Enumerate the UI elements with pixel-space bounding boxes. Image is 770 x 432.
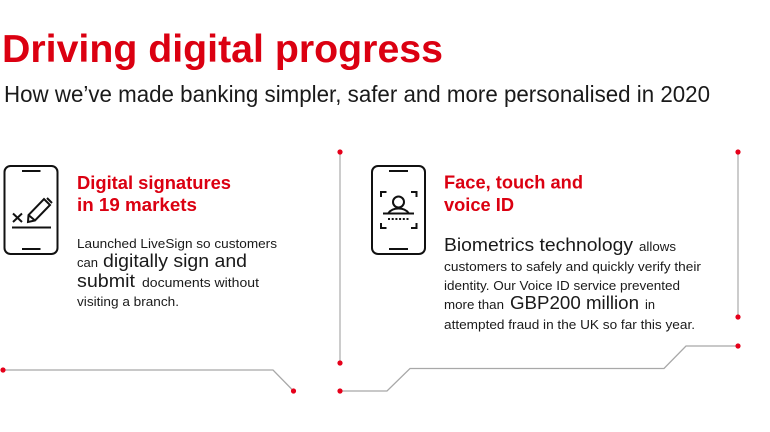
panel: face, touch and voice ID: [372, 166, 702, 332]
text block: biometrics description: identity. Our Voice ID service prevented: [444, 278, 680, 293]
connector: right vertical line: [735, 149, 741, 320]
heading: digital signatures: in 19 markets: [77, 195, 197, 215]
heading: face, touch and voice ID: voice ID: [444, 195, 514, 215]
text block: biometrics description: in: [645, 297, 655, 312]
icon: phone with signature: [4, 166, 58, 254]
text block: digital signatures description: visiting a branch.: [77, 294, 179, 309]
text block: digital signatures description: can: [77, 255, 98, 270]
text block: digital signatures description: submit: [77, 271, 135, 291]
text block: biometrics description: more than: [444, 297, 504, 312]
text block: biometrics description: allows: [639, 239, 677, 254]
panel: digital signatures: [4, 166, 278, 309]
connector: left circuit line: [0, 367, 296, 394]
connector: middle vertical line: [337, 149, 343, 366]
text block: biometrics description: [444, 235, 702, 332]
text block: digital signatures description: Launched LiveSign so customers: [77, 236, 278, 251]
heading: face, touch and voice ID: [444, 172, 583, 215]
icon: phone with face scan: [372, 166, 425, 254]
text block: biometrics description: Biometrics technology: [444, 235, 633, 255]
text block: digital signatures description: digitally sign and: [103, 251, 247, 271]
heading: digital signatures: [77, 173, 231, 215]
heading: digital signatures: Digital signatures: [77, 173, 231, 193]
title: Driving digital progress: [2, 28, 443, 71]
text block: biometrics description: GBP200 million: [510, 293, 639, 313]
text block: digital signatures description: [77, 236, 278, 309]
text block: biometrics description: customers to safely and quickly verify their: [444, 259, 702, 274]
connector: bottom circuit line: [337, 343, 741, 394]
text block: digital signatures description: documents without: [142, 275, 259, 290]
text block: biometrics description: attempted fraud in the UK so far this year.: [444, 317, 695, 332]
heading: face, touch and voice ID: Face, touch and: [444, 172, 583, 192]
subtitle: How we’ve made banking simpler, safer and more personalised in 2020: [4, 81, 710, 107]
